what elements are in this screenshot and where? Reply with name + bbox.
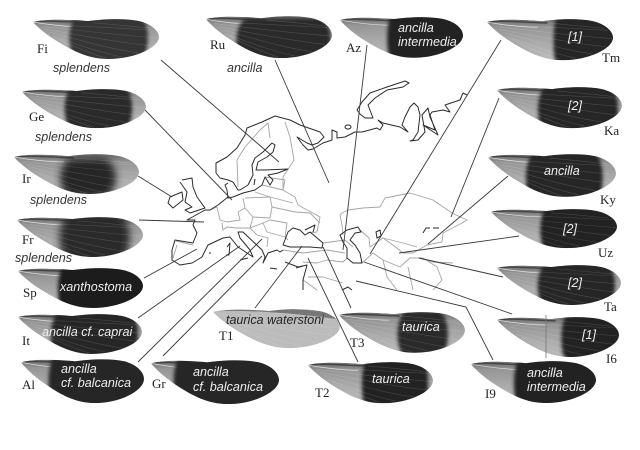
Black Sea [283, 228, 323, 248]
Aral Sea [376, 230, 381, 238]
wing: Sp [18, 268, 143, 308]
wing: Gr: cf. balcanica [193, 380, 263, 394]
wing: Gr: Gr [152, 376, 166, 391]
Lake Balkhash [423, 228, 439, 233]
wing: Sp: xanthostoma [59, 280, 132, 294]
wing: I9: I9 [485, 386, 496, 401]
wing: Uz: [2] [562, 222, 578, 236]
wing: T3: T3 [350, 335, 364, 350]
country borders [173, 122, 467, 290]
wing: Fr [15, 217, 143, 264]
wing: Ta: [2] [567, 276, 583, 290]
wing: Ge: Ge [29, 109, 44, 124]
Novaya Zemlya [357, 81, 409, 118]
wing: Ir: splendens [30, 193, 87, 207]
wing: I9 [471, 361, 596, 403]
wing: Ky: ancilla [544, 164, 580, 178]
wing: Al [21, 359, 144, 404]
wing: Az: ancilla [398, 21, 434, 35]
Britain and Ireland [180, 178, 205, 213]
wing: It: ancilla cf. caprai [42, 325, 133, 339]
wing: Tm: Tm [602, 50, 620, 65]
Mediterranean islands [209, 243, 303, 269]
wing: Fr: Fr [22, 232, 34, 247]
wing fold line [545, 315, 547, 358]
wing: I6: [1] [581, 328, 597, 342]
wing: Ru [206, 16, 332, 75]
wing: I9: ancilla [527, 366, 563, 380]
wing: Uz: Uz [598, 245, 613, 260]
wing: Ky: Ky [600, 192, 616, 207]
wing: T2: T2 [315, 385, 329, 400]
wing: T2 [308, 362, 433, 404]
wing: Gr: ancilla [193, 365, 229, 379]
wing: Tm: [1] [567, 30, 583, 44]
Caspian Sea [340, 227, 362, 263]
Baltic Sea [225, 143, 288, 198]
Atlantic and Mediterranean coasts [172, 197, 283, 265]
coastlines [168, 81, 467, 290]
wing: Al: Al [22, 377, 35, 392]
wing: Ge [22, 89, 146, 144]
wing: T1: taurica waterstoni [226, 313, 325, 327]
wing: I9: intermedia [527, 380, 586, 394]
wing: Sp: Sp [23, 285, 37, 300]
wing: Ka: Ka [604, 123, 619, 138]
wing: Ir [14, 154, 139, 207]
wing: Gr [151, 360, 279, 404]
wing: Ka: [2] [567, 99, 583, 113]
leader lines [138, 40, 519, 362]
wing: I6: I6 [606, 351, 617, 366]
Scandinavia and north coast of Russia [216, 93, 467, 182]
wing: Fi: splendens [53, 61, 110, 75]
wing: I6 [497, 315, 619, 363]
wing: Tm [487, 19, 620, 62]
wing: T1 [213, 308, 340, 348]
wing: Ru: ancilla [227, 61, 262, 75]
wing: Fr: splendens [15, 251, 72, 265]
wing: Az: intermedia [398, 35, 457, 49]
wing: Ir: Ir [22, 171, 31, 186]
wing: Fi: Fi [37, 41, 48, 56]
Turkey south and Levant [285, 262, 352, 290]
wing: Az [340, 17, 463, 58]
wing: Ge: splendens [35, 130, 92, 144]
wing: T3: taurica [402, 320, 440, 334]
wing: Uz [491, 209, 617, 257]
wing: Fi [33, 19, 159, 74]
wing: Al: ancilla [61, 362, 97, 376]
wing: Ta [497, 265, 621, 311]
wing: T2: taurica [372, 372, 410, 386]
wing: Ru: Ru [210, 37, 226, 52]
wing: T1: T1 [219, 328, 233, 343]
wing: It: It [22, 333, 30, 348]
wing: Ta: Ta [604, 299, 617, 314]
wing: It [18, 314, 142, 354]
wing: Ky [488, 154, 616, 206]
map of Eurasia [168, 81, 467, 290]
wing: Ka [497, 87, 622, 135]
wing: T3 [339, 312, 465, 353]
wing: Az: Az [346, 40, 361, 55]
wing: Al: cf. balcanica [61, 376, 131, 390]
